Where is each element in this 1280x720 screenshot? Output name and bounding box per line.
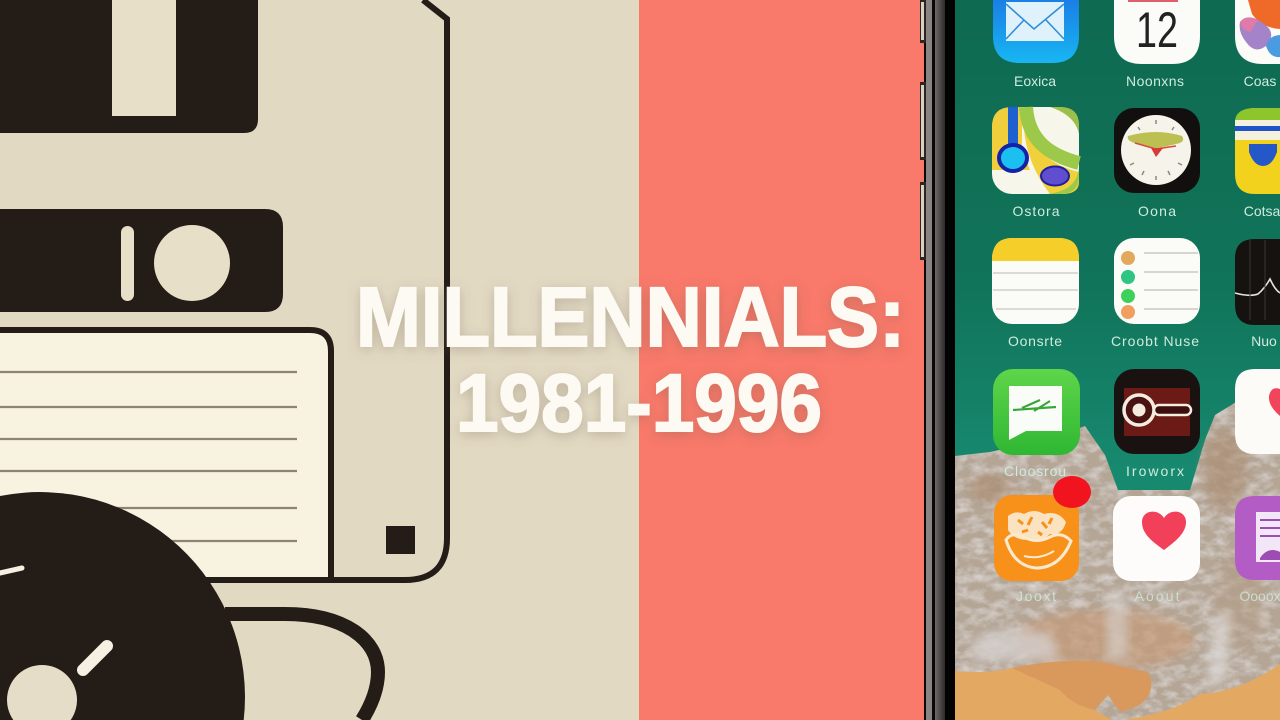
label: Aoout <box>1134 588 1180 604</box>
label: Croobt Nuse <box>1111 333 1199 349</box>
label: Cotsa <box>1244 203 1280 219</box>
floppy middle bar <box>0 209 283 312</box>
label: Eoxica <box>1014 73 1056 89</box>
phone side buttons <box>920 0 926 260</box>
app icon: calendar: 12 <box>1136 2 1178 58</box>
icon: computer mouse cable <box>225 614 378 720</box>
floppy write-protect square <box>386 526 415 554</box>
label: Coas <box>1244 73 1276 89</box>
app icon: purple document <box>1235 496 1280 580</box>
app icon: wallet <box>1235 108 1280 194</box>
label: Cloosrou <box>1004 463 1066 479</box>
app icon: photos <box>1235 0 1280 64</box>
app icon: reminders <box>1114 238 1200 324</box>
notification badge <box>1053 476 1091 508</box>
label: Oona <box>1138 203 1176 219</box>
phone wallpaper: ocean and beach <box>955 0 1280 720</box>
label: Noonxns <box>1126 73 1184 89</box>
app icon: health heart <box>1113 496 1200 581</box>
label: Ostora <box>1012 203 1060 219</box>
floppy outline <box>300 0 447 580</box>
label: Oooox <box>1239 588 1280 604</box>
panel: beige background <box>0 0 640 720</box>
app icon: notes <box>992 238 1079 324</box>
icon: black disc <box>0 492 245 720</box>
label: Jooxt <box>1016 588 1056 604</box>
app icon: heart tile right <box>1235 369 1280 454</box>
title <box>356 270 905 449</box>
app icon: key on dark tile <box>1114 369 1200 454</box>
app icon: maps <box>992 107 1079 194</box>
icon: floppy disk <box>0 0 447 580</box>
app icon: calendar <box>1114 0 1200 64</box>
label: Oonsrte <box>1008 333 1062 349</box>
floppy paper label <box>0 330 331 580</box>
app icon: stocks <box>1235 239 1280 325</box>
label: Nuo <box>1251 333 1277 349</box>
title line: years: 1981-1996 <box>456 358 822 449</box>
floppy metal shutter <box>0 0 258 133</box>
label: Iroworx <box>1126 463 1184 479</box>
wet sand and shoreline <box>955 664 1112 720</box>
app icon: messages <box>993 369 1080 455</box>
app icon: orange food tile <box>994 495 1079 581</box>
icon: smartphone <box>920 0 1280 720</box>
phone frame <box>924 0 955 720</box>
title line: generation name: MILLENNIALS: <box>356 270 905 364</box>
app icon: mail <box>993 0 1079 63</box>
app icon: clock <box>1114 108 1200 193</box>
panel: coral background <box>639 0 925 720</box>
